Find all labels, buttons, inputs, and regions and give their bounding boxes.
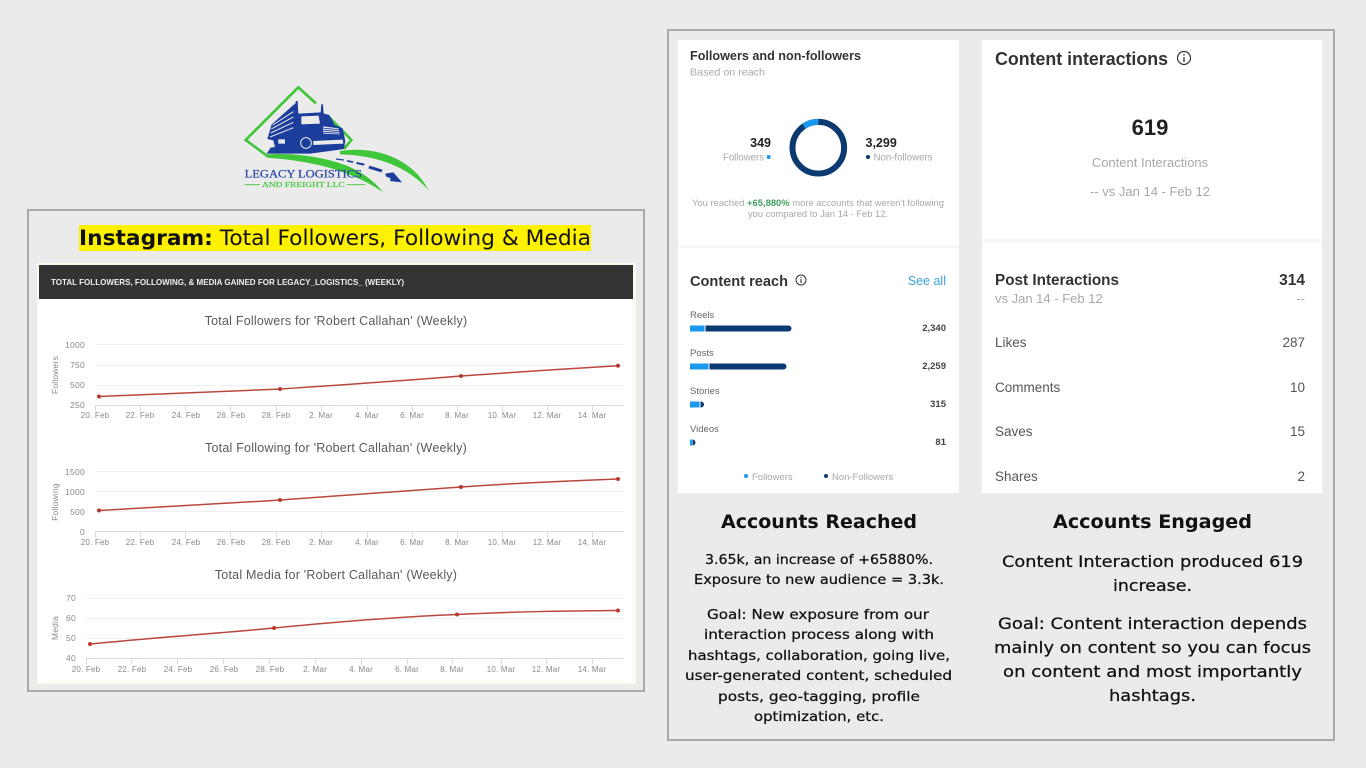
text block: accounts reached goal: interaction process along with xyxy=(704,627,934,643)
card: followers and non-followers: Based on reach xyxy=(690,66,765,78)
line chart: total following: 6. Mar xyxy=(400,538,424,547)
line chart: total media: 10. Mar xyxy=(487,665,515,674)
panel: Instagram totals xyxy=(28,210,644,691)
chart card header bar: TOTAL FOLLOWERS, FOLLOWING, & MEDIA GAINED FOR LEGACY_LOGISTICS_ (WEEKLY) xyxy=(51,277,404,287)
card: post interactions: -- xyxy=(1296,291,1305,306)
bar: stories: Stories xyxy=(690,386,720,397)
text block: accounts engaged summary: increase. xyxy=(1113,576,1192,595)
card: followers and non-followers: you compared to Jan 14 - Feb 12. xyxy=(748,209,888,220)
line chart: total followers: 24. Feb xyxy=(172,411,201,420)
line chart: total media: 2. Mar xyxy=(303,665,327,674)
line chart: total followers: 6. Mar xyxy=(400,411,424,420)
donut chart xyxy=(792,122,844,174)
line chart: total following: 8. Mar xyxy=(445,538,469,547)
line chart: total media: 60 xyxy=(66,613,76,623)
text block: accounts reached goal xyxy=(685,607,952,725)
line chart: total followers: 10. Mar xyxy=(488,411,516,420)
text block: accounts engaged goal xyxy=(994,614,1311,705)
line chart: total followers: 4. Mar xyxy=(355,411,379,420)
text block: accounts engaged summary: Content Interaction produced 619 xyxy=(1002,552,1303,571)
line chart: total media: 26. Feb xyxy=(210,665,239,674)
line chart: total media: 6. Mar xyxy=(395,665,419,674)
line chart: total media: 12. Mar xyxy=(532,665,560,674)
text block: accounts reached summary: 3.65k, an increase of +65880%. xyxy=(705,552,933,568)
line chart: total media: 28. Feb xyxy=(256,665,285,674)
line chart: total media: 70 xyxy=(66,593,76,603)
line chart: total media: Total Media for 'Robert Callahan' (Weekly) xyxy=(215,568,457,582)
line chart: total following: 2. Mar xyxy=(309,538,333,547)
card: content reach: Content reach xyxy=(690,274,788,290)
bar: posts: Posts xyxy=(690,348,714,359)
text block: accounts engaged goal: on content and most importantly xyxy=(1003,662,1302,681)
line chart: total followers: 8. Mar xyxy=(445,411,469,420)
card: content interactions: -- vs Jan 14 - Feb 12 xyxy=(1090,184,1210,199)
bar: stories: 315 xyxy=(930,399,947,410)
line chart: total followers xyxy=(50,314,624,420)
line chart: total following: 26. Feb xyxy=(217,538,246,547)
logo: Legacy Logistics and Freight LLC: LEGACY LOGISTICS xyxy=(245,167,362,181)
bar: posts xyxy=(690,348,946,372)
line chart: total following: 14. Mar xyxy=(578,538,606,547)
line chart: total followers: 2. Mar xyxy=(309,411,333,420)
card: followers and non-followers: Followers and non-followers xyxy=(690,49,861,63)
line chart: total media: 22. Feb xyxy=(118,665,147,674)
line chart: total following xyxy=(50,441,624,547)
card: post interactions: 2 xyxy=(1297,469,1305,484)
card: post interactions: Likes xyxy=(995,335,1027,350)
line chart: total followers: Total Followers for 'Robert Callahan' (Weekly) xyxy=(205,314,467,328)
heading: accounts engaged: Accounts Engaged xyxy=(1053,511,1252,533)
bar: reels: 2,340 xyxy=(922,323,946,334)
card: content reach: See all xyxy=(908,274,946,288)
legend xyxy=(744,472,893,483)
logo: Legacy Logistics and Freight LLC xyxy=(245,87,429,192)
card: post interactions: Post Interactions xyxy=(995,272,1119,289)
text block: accounts reached goal: user-generated content, scheduled xyxy=(685,668,952,684)
bar: stories xyxy=(690,386,947,410)
line chart: total followers: 26. Feb xyxy=(217,411,246,420)
icon: info xyxy=(1178,52,1190,64)
line chart: total media xyxy=(50,568,624,674)
line chart: total followers: 20. Feb xyxy=(81,411,110,420)
line chart: total following: 1500 xyxy=(65,467,85,477)
card: content interactions: 619 xyxy=(1132,115,1168,140)
card: followers and non-followers: 3,299 xyxy=(866,136,897,150)
chart card header bar xyxy=(39,265,633,299)
card: followers and non-followers xyxy=(678,40,959,245)
text block: accounts reached goal: posts, geo-tagging, profile xyxy=(718,689,920,705)
line chart: total following: 4. Mar xyxy=(355,538,379,547)
text block: accounts engaged goal: hashtags. xyxy=(1109,686,1196,705)
card: post interactions: Shares xyxy=(995,469,1038,484)
legend: Followers xyxy=(752,472,793,483)
line chart: total followers: 22. Feb xyxy=(126,411,155,420)
line chart: total following: 24. Feb xyxy=(172,538,201,547)
line chart: total followers: 500 xyxy=(70,380,85,390)
line chart: total following: Total Following for 'Robert Callahan' (Weekly) xyxy=(205,441,467,455)
line chart: total media: 14. Mar xyxy=(578,665,606,674)
line chart: total followers: 250 xyxy=(70,400,85,410)
line chart: total followers: 14. Mar xyxy=(578,411,606,420)
line chart: total media: 8. Mar xyxy=(440,665,464,674)
heading: Instagram total followers, following and media: Instagram: Total Followers, Following & Media xyxy=(79,226,591,250)
bar: videos: 81 xyxy=(935,437,947,448)
card: post interactions: Comments xyxy=(995,380,1061,395)
line chart: total following: 500 xyxy=(70,507,85,517)
line chart: total following: 12. Mar xyxy=(533,538,561,547)
text block: accounts reached goal: Goal: New exposure from our xyxy=(707,607,929,623)
card: post interactions: 10 xyxy=(1290,380,1305,395)
line chart: total media: 40 xyxy=(66,653,76,663)
card: post interactions: 314 xyxy=(1279,272,1305,289)
line chart: total following: 20. Feb xyxy=(81,538,110,547)
bar: reels: Reels xyxy=(690,310,715,321)
line chart: total following: 28. Feb xyxy=(262,538,291,547)
text block: accounts reached summary xyxy=(694,552,944,588)
text block: accounts reached goal: hashtags, collaboration, going live, xyxy=(688,648,950,664)
card: followers and non-followers: Non-followers xyxy=(874,152,932,164)
line chart: total followers: 1000 xyxy=(65,340,85,350)
card: post interactions xyxy=(982,239,1322,493)
text block: accounts reached goal: optimization, etc. xyxy=(754,709,884,725)
text block: accounts engaged goal: Goal: Content interaction depends xyxy=(998,614,1307,633)
line chart: total following: 22. Feb xyxy=(126,538,155,547)
card: post interactions: Saves xyxy=(995,424,1033,439)
card: content interactions: Content Interactions xyxy=(1092,155,1209,170)
line chart: total followers: 750 xyxy=(70,360,85,370)
logo: Legacy Logistics and Freight LLC: AND FREIGHT LLC xyxy=(262,180,345,189)
card: content interactions xyxy=(982,40,1322,239)
line chart: total followers: Followers xyxy=(50,356,60,394)
line chart: total following: 1000 xyxy=(65,487,85,497)
line chart: total media: 4. Mar xyxy=(349,665,373,674)
card: followers and non-followers: Followers xyxy=(723,152,764,164)
card: followers and non-followers: 349 xyxy=(750,136,771,150)
text block: accounts reached summary: Exposure to new audience = 3.3k. xyxy=(694,572,944,588)
card: post interactions: 287 xyxy=(1282,335,1305,350)
card: content reach xyxy=(678,245,959,493)
text block: accounts engaged goal: mainly on content so you can focus xyxy=(994,638,1311,657)
line chart: total media: 50 xyxy=(66,633,76,643)
legend: Non-Followers xyxy=(832,472,893,483)
card: post interactions: 15 xyxy=(1290,424,1305,439)
bar: videos: Videos xyxy=(690,424,719,435)
line chart: total media: 24. Feb xyxy=(164,665,193,674)
line chart: total following: 0 xyxy=(80,527,85,537)
heading: accounts reached: Accounts Reached xyxy=(721,511,917,533)
card: content interactions: Content interactions xyxy=(995,49,1168,69)
line chart: total following: 10. Mar xyxy=(488,538,516,547)
line chart: total followers: 12. Mar xyxy=(533,411,561,420)
card: post interactions: vs Jan 14 - Feb 12 xyxy=(995,291,1103,306)
text block: accounts engaged summary xyxy=(1002,552,1303,595)
chart card xyxy=(37,263,636,684)
line chart: total following: Following xyxy=(50,483,60,521)
line chart: total media: Media xyxy=(50,616,60,640)
bar: reels xyxy=(690,310,946,334)
line chart: total followers: 28. Feb xyxy=(262,411,291,420)
bar: videos xyxy=(690,424,947,448)
card: followers and non-followers: You reached +65,880% more accounts that weren't following xyxy=(692,198,944,209)
bar: posts: 2,259 xyxy=(922,361,946,372)
panel: accounts reached and engaged xyxy=(668,30,1334,740)
icon: info xyxy=(796,275,806,285)
line chart: total media: 20. Feb xyxy=(72,665,101,674)
